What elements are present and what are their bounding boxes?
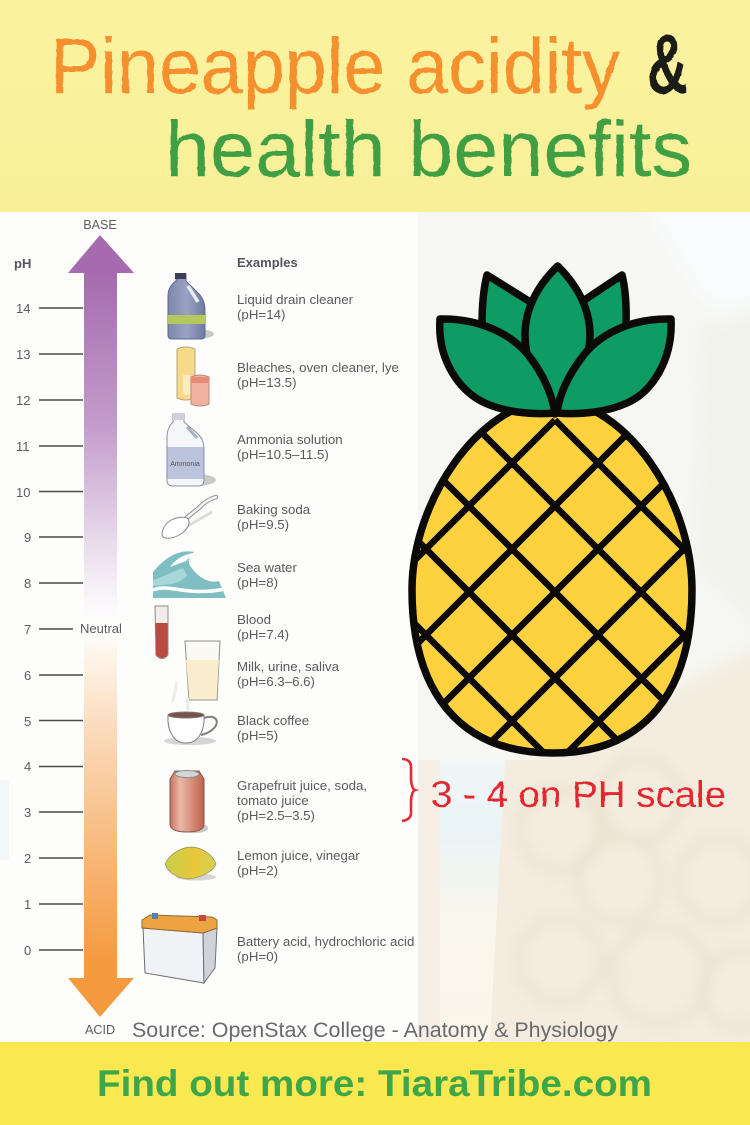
example: grapefruit juice, soda: tomato juice [237,793,309,808]
arrow down: acid [68,640,134,1037]
example: grapefruit juice, soda [170,770,367,833]
example: black coffee: (pH=5) [237,728,278,743]
arrow up: base [68,218,134,616]
pH scale axis: pH [14,256,31,271]
label: Ammonia [170,461,200,468]
example: lemon juice, vinegar [165,847,360,880]
label: Bleaches, oven cleaner, lye [237,360,399,375]
example: ammonia solution: (pH=10.5–11.5) [237,447,329,462]
pH scale axis: 6 [24,668,31,683]
big right leaf [557,319,671,414]
footer band: Find out more: TiaraTribe.com [97,1063,652,1104]
neutral label: Neutral [80,621,122,636]
red bracket [402,759,415,821]
label: Milk, urine, saliva [237,659,340,674]
title line 1: Pineapple acidity [50,21,620,110]
example: milk [185,641,340,700]
arrow down: acid: ACID [85,1023,115,1037]
arrow up: base: BASE [83,218,117,232]
small right leaf [565,275,626,380]
example: liquid drain cleaner: (pH=14) [237,307,285,322]
centre leaf [525,266,590,414]
example: ammonia solution: Ammonia solution [237,432,343,447]
small left leaf [482,275,545,380]
pH scale axis: 14 [16,301,30,316]
label: Battery acid, hydrochloric acid [237,934,414,949]
example: sea water [153,551,297,598]
example: battery acid [142,913,414,983]
pH scale axis: 13 [16,347,30,362]
examples heading: Examples [237,255,298,270]
example: black coffee [164,682,309,745]
pH scale axis: 1 [24,897,31,912]
example: baking soda [162,497,311,538]
pH scale axis: 10 [16,485,30,500]
source line: Source: OpenStax College - Anatomy & Physiology [132,1019,618,1042]
label: Sea water [237,560,297,575]
example: battery acid: (pH=0) [237,949,278,964]
pH scale axis: 2 [24,851,31,866]
callout: 3 - 4 on PH scale [402,759,726,821]
icon: pineapple [408,262,696,757]
label: Blood [237,612,271,627]
example: bleaches: (pH=13.5) [237,375,296,390]
example: baking soda: (pH=9.5) [237,517,289,532]
pH scale axis: 7 [24,622,31,637]
white chart panel [0,212,418,1042]
pineapple body [412,399,692,753]
pH scale axis: 5 [24,714,31,729]
label: Black coffee [237,713,309,728]
label: Baking soda [237,502,311,517]
example: liquid drain cleaner [168,273,354,339]
example: milk: (pH=6.3–6.6) [237,674,315,689]
pH scale axis: 0 [24,943,31,958]
example: blood: (pH=7.4) [237,627,289,642]
footer band [0,1042,750,1125]
big left leaf [440,319,555,414]
example: ammonia solution [167,413,343,486]
header band [0,0,750,212]
pH scale axis: 12 [16,393,30,408]
example: lemon juice, vinegar: (pH=2) [237,863,278,878]
label: Grapefruit juice, soda, [237,778,367,793]
label: Lemon juice, vinegar [237,848,360,863]
pH scale axis: 8 [24,576,31,591]
faded photo background [0,200,750,1060]
pH scale axis: 9 [24,530,31,545]
callout: 3 - 4 on PH scale: 3 - 4 on PH scale [431,774,726,815]
pH scale axis: 11 [16,439,30,454]
title line 2: health benefits [165,104,692,193]
pH scale axis [14,256,83,958]
example: grapefruit juice, soda: (pH=2.5–3.5) [237,808,315,823]
example: sea water: (pH=8) [237,575,278,590]
example: blood [155,606,289,658]
pH scale axis: 4 [24,759,31,774]
pineapple lattice [417,418,686,750]
example: bleaches [177,347,399,406]
pH scale axis: 3 [24,805,31,820]
label: Liquid drain cleaner [237,292,354,307]
title ampersand: & [647,17,688,111]
